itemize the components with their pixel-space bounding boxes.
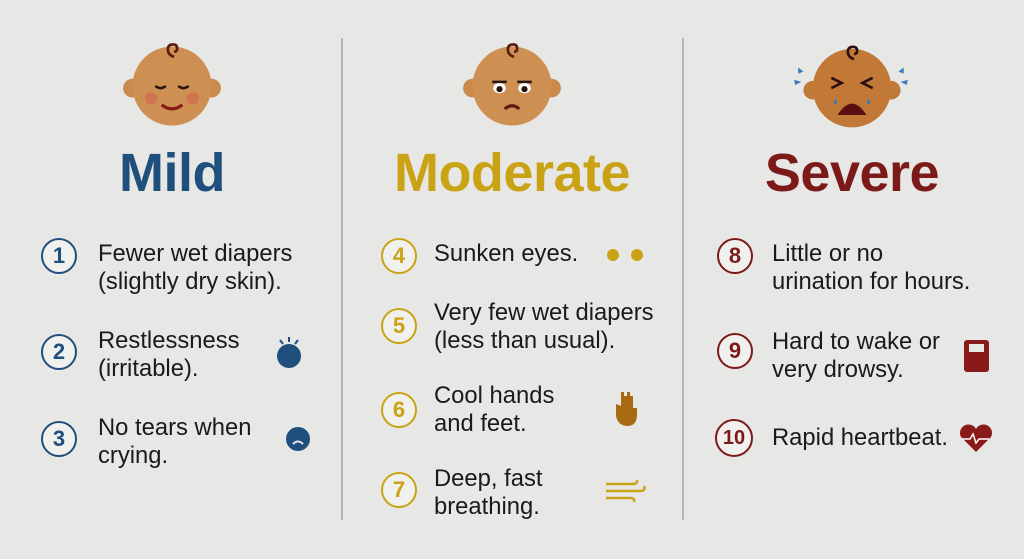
icon: sad [286, 427, 310, 451]
severe items [717, 238, 753, 274]
text: (slightly dry skin). [98, 268, 282, 295]
text: 9 [729, 338, 741, 363]
text: 5 [393, 313, 405, 338]
text: Rapid heartbeat. [772, 424, 948, 451]
text: Little or no [772, 240, 883, 267]
severe items: 8 [729, 243, 741, 268]
mild items [41, 238, 77, 274]
text: 6 [393, 397, 405, 422]
icon: severe crying baby [794, 46, 908, 128]
text: 3 [53, 426, 65, 451]
title: Moderate: Moderate [394, 143, 630, 203]
text: Fewer wet diapers [98, 240, 292, 267]
text: Hard to wake or [772, 328, 940, 355]
icon: wind [606, 480, 646, 502]
text: 10 [723, 426, 745, 448]
moderate items [381, 238, 417, 274]
text: (irritable). [98, 355, 198, 382]
icon: heart [960, 424, 992, 452]
icon: irritable [277, 337, 301, 368]
title: Mild: Mild [119, 143, 225, 203]
moderate items: 4 [393, 243, 405, 268]
icon: lock [964, 340, 989, 372]
text: very drowsy. [772, 356, 904, 383]
text: crying. [98, 442, 168, 469]
title: Severe: Severe [765, 143, 939, 203]
text: and feet. [434, 410, 527, 437]
text: Very few wet diapers [434, 299, 654, 326]
icon: hand [616, 392, 637, 426]
text: Sunken eyes. [434, 240, 578, 267]
icon: mild baby face [123, 43, 221, 126]
text: No tears when [98, 414, 251, 441]
text: 7 [393, 477, 405, 502]
text: breathing. [434, 493, 540, 520]
mild items: 1 [53, 243, 65, 268]
text: urination for hours. [772, 268, 970, 295]
text: Restlessness [98, 327, 240, 354]
icon: moderate baby face [463, 43, 561, 126]
text: Cool hands [434, 382, 554, 409]
text: 2 [53, 339, 65, 364]
icon: eyes [607, 249, 643, 261]
text: (less than usual). [434, 327, 615, 354]
text: Deep, fast [434, 465, 542, 492]
